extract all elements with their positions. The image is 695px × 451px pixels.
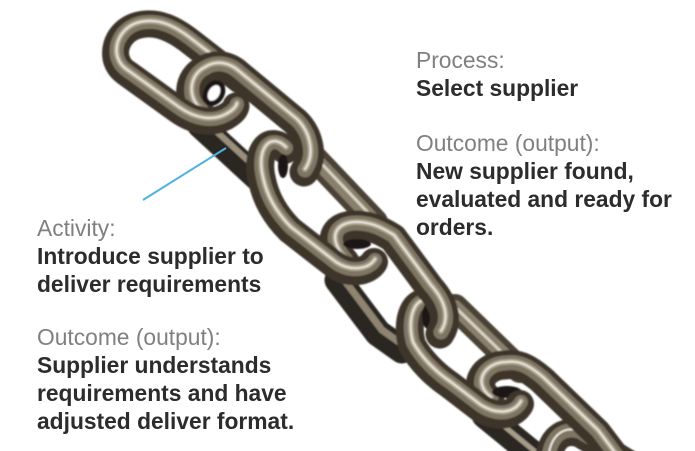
- text block: process outcome: evaluated and ready for: [416, 186, 672, 212]
- chain link 1 front portion: [116, 55, 237, 121]
- text block: activity outcome: Supplier understands: [37, 352, 271, 378]
- chain link 2: [191, 63, 311, 178]
- text block: activity: deliver requirements: [37, 271, 261, 297]
- chain link 4 back run: [338, 277, 406, 350]
- text block: activity outcome: [37, 324, 294, 434]
- chain link 5: [410, 300, 521, 415]
- text block: process outcome: New supplier found,: [416, 158, 634, 184]
- text block: process outcome: [416, 130, 672, 240]
- text block: activity outcome: Outcome (output):: [37, 324, 221, 350]
- chain link 6: [481, 362, 626, 451]
- chain link 4: [334, 222, 446, 334]
- text block: activity: Activity:: [37, 215, 116, 241]
- chain link 1 back portion: [116, 21, 241, 121]
- text block: activity: Introduce supplier to: [37, 243, 264, 269]
- text block: activity outcome: adjusted deliver format.: [37, 408, 294, 434]
- chain link 3: [260, 141, 375, 271]
- text block: activity outcome: requirements and have: [37, 380, 287, 406]
- chain link 5 back run: [455, 307, 520, 370]
- chain link 2 back run: [200, 121, 267, 182]
- text block: process: Select supplier: [416, 75, 578, 101]
- text block: process: [416, 47, 578, 101]
- blue callout line: [143, 148, 226, 200]
- text block: process outcome: Outcome (output):: [416, 130, 600, 156]
- chain link 6 back run: [485, 413, 543, 451]
- chain link 3 back run: [300, 142, 376, 222]
- text block: activity: [37, 215, 264, 297]
- text block: process outcome: orders.: [416, 214, 493, 240]
- chain link 7: [548, 429, 640, 451]
- text block: process: Process:: [416, 47, 505, 73]
